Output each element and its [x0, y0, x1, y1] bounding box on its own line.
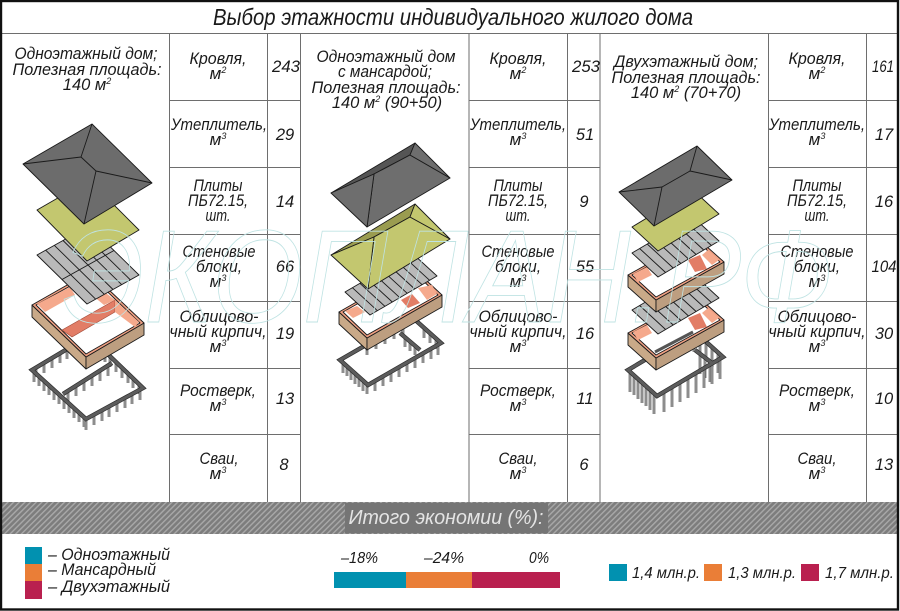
table: single-storey quantities: Кровля, [190, 49, 246, 68]
table: attic quantities: 3 [521, 273, 526, 283]
upper walls [628, 237, 724, 312]
table: two-storey quantities: м [809, 130, 820, 149]
table: attic quantities: Облицово- [478, 307, 558, 326]
table: single-storey quantities: Облицово- [180, 307, 259, 326]
table: attic quantities: 6 [579, 456, 589, 474]
heading: attic house: Одноэтажный дом [316, 48, 456, 66]
insulation [331, 204, 450, 289]
table: attic quantities: м [510, 130, 521, 149]
table: single-storey quantities: блоки, [196, 257, 242, 276]
heading: two-storey house [612, 53, 760, 102]
roof [23, 124, 152, 224]
table: single-storey quantities: 3 [221, 397, 226, 407]
table: attic quantities: 3 [521, 397, 526, 407]
table: single-storey quantities: м [210, 130, 221, 149]
walls [32, 272, 144, 369]
table: two-storey quantities: 17 [875, 126, 894, 144]
upper floor slabs [632, 217, 719, 277]
table: single-storey quantities [170, 49, 301, 483]
title: Выбор этажности индивидуального жилого дома [213, 4, 693, 30]
table: single-storey quantities: Ростверк, [180, 381, 256, 400]
table: two-storey quantities: шт. [804, 206, 830, 225]
legend: costs: 1,4 млн.р. [632, 565, 700, 582]
table: attic quantities: 3 [521, 465, 526, 475]
piles and grillage [340, 318, 441, 394]
table: single-storey quantities: 243 [271, 58, 301, 76]
table: single-storey quantities: м [210, 64, 221, 83]
table: two-storey quantities: 3 [820, 397, 825, 407]
table: attic quantities: м [510, 396, 521, 415]
table: single-storey quantities: м [210, 272, 221, 291]
table: attic quantities: 16 [576, 325, 595, 343]
legend: house types: – Одноэтажный [47, 546, 170, 564]
table: two-storey quantities: 161 [872, 58, 894, 76]
lower floor slabs [632, 274, 719, 334]
table: two-storey quantities: 10 [875, 390, 894, 408]
table: attic quantities: Стеновые [482, 242, 554, 261]
roof [331, 143, 450, 227]
table: two-storey quantities: 30 [875, 325, 894, 343]
table: attic quantities: м [510, 464, 521, 483]
savings bar: –18% [340, 550, 378, 567]
heading: attic house: (90+50) [380, 94, 442, 112]
table: single-storey quantities: 3 [221, 338, 226, 348]
table: attic quantities: 55 [576, 258, 595, 276]
table: two-storey quantities: 3 [820, 273, 825, 283]
table: two-storey quantities: м [809, 272, 820, 291]
table: single-storey quantities: м [210, 337, 221, 356]
savings bar: –24% [423, 550, 464, 567]
table: attic quantities: 253 [571, 58, 601, 76]
table: single-storey quantities: м [210, 464, 221, 483]
heading: two-storey house: Полезная площадь: [612, 69, 760, 87]
exploded drawing: attic house [331, 143, 450, 394]
exploded drawing: single-storey house [23, 124, 152, 430]
table: two-storey quantities: 3 [820, 338, 825, 348]
heading: two-storey house: 140 м [631, 84, 674, 102]
legend: house types [25, 546, 170, 599]
table: attic quantities: блоки, [495, 257, 541, 276]
table: single-storey quantities: 8 [279, 456, 289, 474]
table: attic quantities: 3 [521, 131, 526, 141]
heading: attic house: Полезная площадь: [312, 79, 460, 97]
table: two-storey quantities: ПБ72.15, [787, 191, 847, 210]
floor slabs [37, 226, 139, 304]
floor slabs [345, 253, 437, 315]
table: two-storey quantities: 104 [872, 258, 896, 276]
savings bar: 0% [529, 550, 549, 567]
heading: two-storey house: Двухэтажный дом; [612, 53, 758, 71]
table: single-storey quantities: шт. [206, 206, 230, 225]
table: attic quantities: 11 [576, 390, 594, 408]
table: two-storey quantities: Плиты [792, 176, 842, 195]
table: single-storey quantities: Сваи, [200, 449, 238, 468]
table grid [2, 33, 898, 502]
table: attic quantities: Сваи, [498, 449, 538, 468]
house column 1: single-storey [12, 45, 301, 483]
table: single-storey quantities: 3 [221, 273, 226, 283]
piles and grillage [628, 331, 723, 414]
banner: total savings [2, 502, 898, 534]
table: two-storey quantities: Кровля, [788, 49, 846, 68]
table: two-storey quantities: Ростверк, [779, 381, 855, 400]
table: single-storey quantities: 29 [275, 126, 294, 144]
table: two-storey quantities: 3 [820, 465, 825, 475]
insulation [37, 180, 139, 261]
table: attic quantities [469, 49, 601, 483]
table: two-storey quantities: блоки, [794, 257, 840, 276]
heading: single-storey house: 2 [105, 76, 111, 86]
table: attic quantities: ПБ72.15, [488, 191, 548, 210]
heading: single-storey house: Одноэтажный дом; [14, 45, 158, 63]
table: single-storey quantities: Утеплитель, [170, 115, 267, 134]
table: single-storey quantities: 2 [220, 65, 226, 75]
table: attic quantities: Плиты [494, 176, 543, 195]
table: single-storey quantities: ПБ72.15, [188, 191, 248, 210]
table: two-storey quantities: м [809, 64, 820, 83]
table: two-storey quantities: Утеплитель, [768, 115, 865, 134]
heading: attic house [312, 48, 460, 112]
table: two-storey quantities: м [809, 464, 820, 483]
legend: house types: – Мансардный [47, 561, 156, 579]
table: single-storey quantities: 66 [276, 258, 295, 276]
table: attic quantities: м [510, 272, 521, 291]
table: two-storey quantities: 3 [820, 131, 825, 141]
table: attic quantities: Ростверк, [480, 381, 556, 400]
table: attic quantities: Кровля, [490, 49, 546, 68]
table: attic quantities: шт. [506, 206, 530, 225]
table: attic quantities: чный кирпич, [470, 322, 566, 341]
insulation [632, 190, 719, 251]
savings bar [334, 550, 560, 588]
table: single-storey quantities: чный кирпич, [170, 322, 266, 341]
table: two-storey quantities: 13 [875, 456, 894, 474]
heading: two-storey house: 2 [673, 84, 679, 94]
table: two-storey quantities: м [809, 396, 820, 415]
table: attic quantities: 9 [579, 193, 589, 211]
heading: single-storey house: Полезная площадь: [12, 61, 162, 79]
legend: costs: 1,3 млн.р. [728, 565, 796, 582]
piles and grillage [32, 336, 143, 430]
table: two-storey quantities: Сваи, [798, 449, 836, 468]
table: two-storey quantities: чный кирпич, [768, 322, 866, 341]
legend: house types: – Двухэтажный [47, 578, 170, 596]
table: two-storey quantities: 2 [819, 65, 825, 75]
heading: attic house: 140 м [332, 94, 375, 112]
table: attic quantities: Утеплитель, [469, 115, 566, 134]
table: single-storey quantities: 3 [221, 131, 226, 141]
table: single-storey quantities: 13 [276, 390, 295, 408]
heading: single-storey house [12, 45, 162, 94]
table: single-storey quantities: Стеновые [182, 242, 256, 261]
heading: single-storey house: 140 м [63, 76, 106, 94]
heading: attic house: с мансардой; [338, 63, 432, 81]
legend: costs [609, 564, 894, 582]
table: two-storey quantities: Стеновые [780, 242, 854, 261]
heading: attic house: 2 [374, 94, 380, 104]
heading: two-storey house: (70+70) [679, 84, 741, 102]
table: single-storey quantities: Плиты [194, 176, 243, 195]
table: single-storey quantities: 3 [221, 465, 226, 475]
table: attic quantities: 3 [521, 338, 526, 348]
table: attic quantities: м [510, 337, 521, 356]
banner: total savings: Итого экономии (%): [348, 507, 544, 529]
table: two-storey quantities: м [809, 337, 820, 356]
exploded drawing: two-storey house [619, 146, 732, 414]
table: single-storey quantities: м [210, 396, 221, 415]
lower walls [628, 295, 724, 370]
walls [339, 269, 442, 350]
table: two-storey quantities [768, 49, 896, 483]
table: single-storey quantities: 14 [276, 193, 294, 211]
table: two-storey quantities: Облицово- [778, 307, 857, 326]
table: attic quantities: 51 [576, 126, 594, 144]
roof [619, 146, 732, 226]
legend: costs: 1,7 млн.р. [825, 565, 894, 582]
house column 3: two-storey [612, 49, 896, 483]
table: two-storey quantities: 16 [875, 193, 894, 211]
table: attic quantities: м [510, 64, 521, 83]
house column 2: attic house [312, 48, 601, 483]
table: attic quantities: 2 [520, 65, 526, 75]
table: single-storey quantities: 19 [276, 325, 294, 343]
